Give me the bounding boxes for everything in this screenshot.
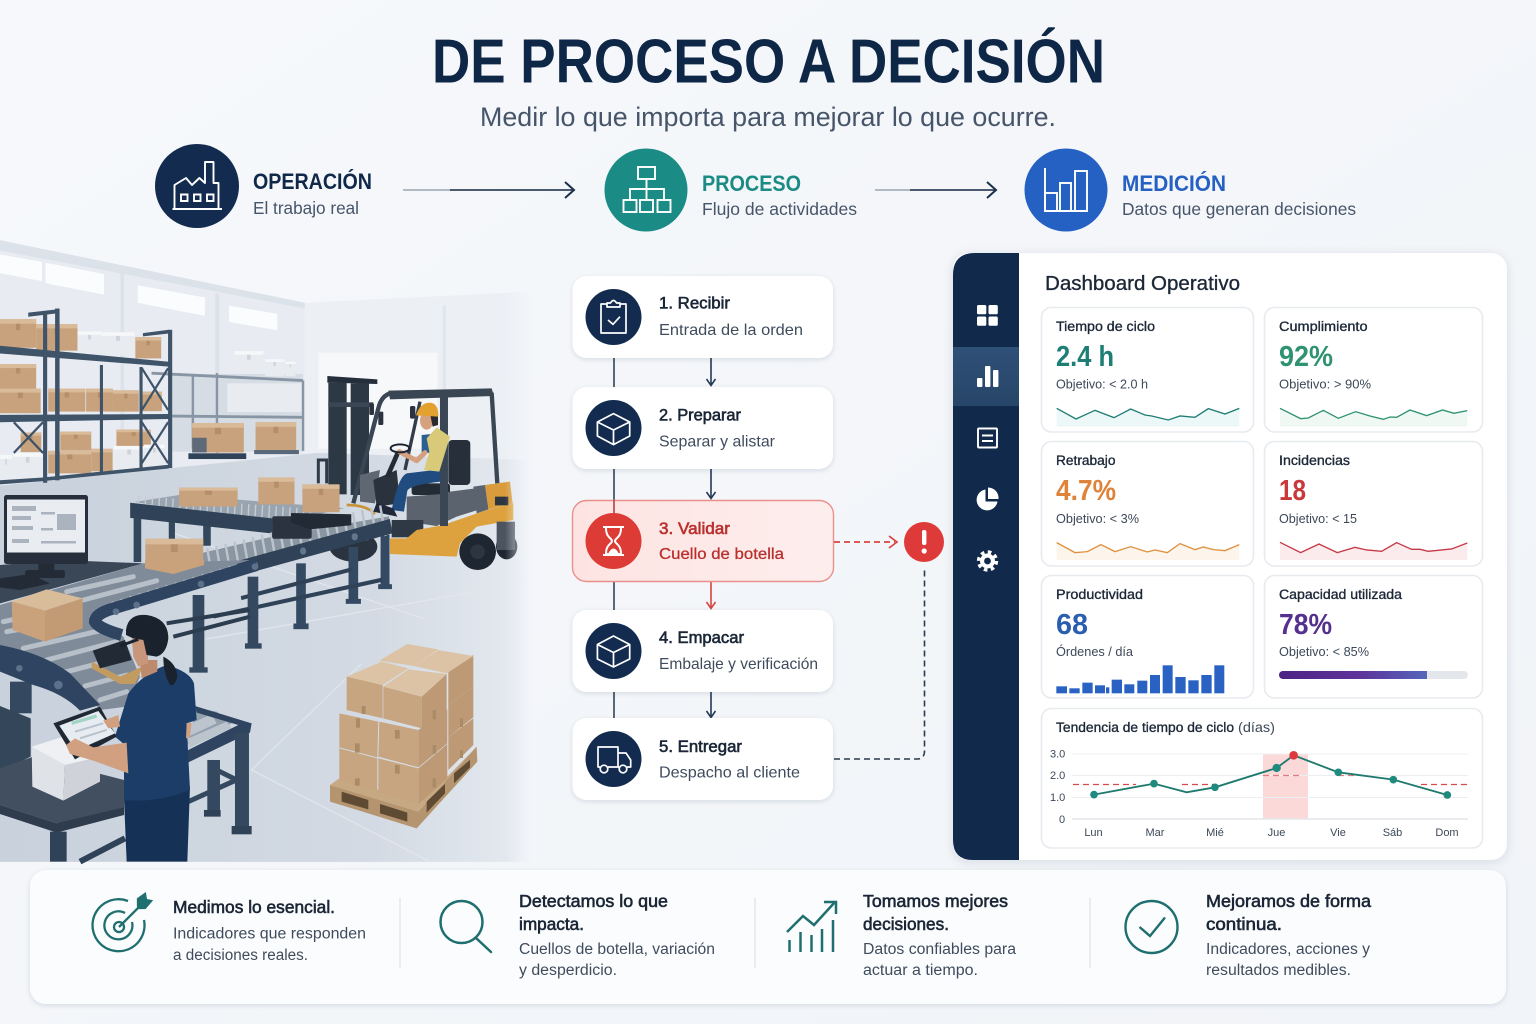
packing area: lower conveyor, table and worker (0, 558, 262, 862)
icon: target (93, 894, 151, 951)
scene edge fade (505, 290, 535, 862)
summary: mejoramos: resultados medibles. (1206, 962, 1351, 979)
header step: operación (155, 144, 372, 228)
summary: detectamos: impacta. (519, 914, 584, 934)
summary: medimos: Medimos lo esencial. (173, 897, 335, 917)
icon: bars (977, 366, 998, 387)
worker (53, 615, 197, 862)
step 2: preparar (572, 387, 833, 469)
chart title: (días) (1238, 720, 1275, 735)
pallet of boxes (330, 644, 477, 828)
connectors: process flow (614, 358, 716, 719)
forklift driver (373, 403, 450, 517)
axis labels: 3.0 (1050, 748, 1065, 760)
forklift (318, 376, 517, 570)
step 5: entregar (572, 718, 833, 800)
day labels (1084, 827, 1459, 839)
process flow (572, 276, 834, 800)
icon: delivery truck (586, 731, 642, 787)
summary: medimos: Indicadores que responden (173, 926, 366, 942)
day labels: Mar (1146, 827, 1165, 839)
sparkline: tiempo de ciclo (1057, 408, 1239, 427)
desk with keyboard (0, 558, 143, 603)
step 3: validar (bottleneck): Cuello de botella (659, 546, 784, 563)
box machine (0, 706, 31, 772)
icon: alert (904, 522, 944, 562)
dashboard panel (953, 253, 1507, 860)
white box (32, 737, 100, 801)
chart title: Tendencia de tiempo de ciclo (1056, 720, 1234, 735)
text: entregar: 5. Entregar (659, 738, 743, 756)
kpi card: productividad: Órdenes / día (1056, 644, 1133, 659)
summary: mejoramos: continua. (1206, 914, 1282, 934)
kpi card: productividad (1042, 576, 1254, 698)
arrow: bottleneck to alert (834, 536, 897, 548)
icon: hourglass (586, 513, 642, 569)
right table frame (185, 706, 252, 834)
axis labels: 1.0 (1050, 792, 1065, 804)
subtitle: Medir lo que importa para mejorar lo que ocurre. (480, 102, 1056, 132)
trend chart card (1042, 708, 1482, 848)
sparkline: cumplimiento (1280, 408, 1467, 427)
kpi card: productividad: 68 (1056, 609, 1088, 641)
axis labels: 0 (1059, 814, 1065, 826)
icon: clipboard (586, 289, 642, 345)
kpi card: incidencias: Objetivo: < 15 (1279, 512, 1357, 526)
conveyor rails (0, 563, 258, 711)
dashboard sidebar (953, 253, 1019, 860)
heading: medición: MEDICIÓN (1122, 171, 1226, 196)
summary: detectamos: y desperdicio. (519, 962, 617, 979)
kpi card: cumplimiento: Objetivo: > 90% (1279, 378, 1371, 392)
target line (1073, 776, 1468, 784)
forklift body (390, 482, 515, 557)
summary: medimos: a decisiones reales. (173, 947, 308, 964)
day labels: Sáb (1383, 827, 1402, 839)
back shelving (152, 351, 303, 459)
summary: tomamos: Tomamos mejores (863, 891, 1008, 911)
step 3: validar (bottleneck) (572, 500, 834, 582)
text: el trabajo real: El trabajo real (253, 198, 359, 218)
main conveyor with legs (0, 513, 392, 643)
illustration: warehouse floor operation (0, 240, 534, 862)
legs and frame (10, 577, 262, 713)
kpi card: incidencias (1264, 442, 1482, 566)
day labels: Vie (1330, 827, 1346, 839)
summary: tomamos (787, 891, 1016, 979)
day labels: Lun (1084, 827, 1103, 839)
text: validar: 3. Validar (659, 520, 731, 538)
icon: magnifier (440, 901, 491, 952)
kpi card: tiempo de ciclo: Tiempo de ciclo (1056, 319, 1155, 334)
dashed feedback line (834, 568, 924, 759)
kpi card: incidencias: 18 (1279, 475, 1306, 507)
dashboard title: Dashboard Operativo (1045, 273, 1240, 295)
day labels: Jue (1268, 827, 1285, 839)
icon: pie chart (977, 487, 999, 510)
kpi card: cumplimiento: 92% (1279, 341, 1333, 373)
icon: factory (155, 144, 239, 228)
icon: document (978, 428, 997, 448)
step 1: recibir (572, 276, 833, 358)
kpi card: capacidad utilizada: 78% (1279, 609, 1332, 641)
icon: rising chart (787, 902, 836, 952)
conveyor surface (0, 560, 250, 710)
title: DE PROCESO A DECISIÓN (432, 26, 1105, 96)
kpi card: tiempo de ciclo (1042, 308, 1254, 432)
day labels: Dom (1435, 827, 1459, 839)
box on conveyor (12, 560, 204, 642)
text: datos que generan decisiones: Datos que generan decisiones (1122, 199, 1356, 219)
left shelving with boxes (0, 309, 172, 484)
icon: check circle (1126, 901, 1178, 953)
kpi card: cumplimiento (1264, 308, 1482, 432)
text: recibir: 1. Recibir (659, 294, 731, 312)
heading: proceso: PROCESO (702, 171, 801, 196)
arrow: operación to proceso (403, 182, 574, 198)
header step: proceso (604, 148, 857, 232)
scanner (92, 640, 143, 684)
kpi card: retrabajo: 4.7% (1056, 475, 1116, 507)
highlighted day band (1263, 754, 1308, 819)
sparkline: incidencias (1280, 542, 1467, 560)
text: empacar: 4. Empacar (659, 629, 745, 647)
summary: detectamos (440, 891, 715, 979)
line over validar icon (613, 500, 615, 513)
summary: tomamos: Datos confiables para (863, 941, 1016, 958)
arrow: proceso to medición (875, 182, 996, 198)
kpi card: retrabajo: Retrabajo (1056, 453, 1116, 468)
sparkline: retrabajo (1057, 543, 1239, 560)
axis labels: 2.0 (1050, 770, 1065, 782)
bottom summary bar (30, 870, 1506, 1004)
summary: mejoramos: Indicadores, acciones y (1206, 941, 1370, 958)
trend line (1090, 751, 1451, 799)
kpi card: productividad: Productividad (1056, 587, 1143, 602)
day labels: Mié (1206, 827, 1224, 839)
warehouse walls and floor (0, 240, 534, 862)
step 1: recibir: Entrada de la orden (659, 322, 803, 339)
icon: bar chart (1024, 148, 1108, 232)
kpi card: tiempo de ciclo: 2.4 h (1056, 341, 1114, 373)
kpi card: retrabajo: Objetivo: < 3% (1056, 512, 1139, 526)
bar chart: productividad (1056, 665, 1224, 693)
step 2: preparar: Separar y alistar (659, 434, 776, 450)
header step: medición (1024, 148, 1356, 232)
step 4: empacar (572, 610, 833, 692)
text: flujo de actividades: Flujo de actividades (702, 199, 857, 219)
icon: gear (978, 552, 996, 570)
kpi card: incidencias: Incidencias (1279, 453, 1350, 468)
summary: mejoramos: Mejoramos de forma (1206, 891, 1371, 911)
axis labels (1050, 748, 1065, 826)
packing table (0, 757, 125, 862)
summary: mejoramos (1126, 891, 1371, 979)
icon: org chart (604, 148, 688, 232)
kpi card: capacidad utilizada: Capacidad utilizada (1279, 587, 1402, 602)
summary: tomamos: decisiones. (863, 914, 949, 934)
progress bar: capacidad (1279, 671, 1468, 679)
kpi card: retrabajo (1042, 442, 1254, 566)
back conveyor (130, 477, 344, 562)
summary: medimos (93, 894, 366, 964)
summary: tomamos: actuar a tiempo. (863, 962, 978, 979)
summary: detectamos: Detectamos lo que (519, 891, 668, 911)
icon: closed box (586, 623, 642, 679)
icon: grid (977, 305, 998, 326)
summary: detectamos: Cuellos de botella, variación (519, 941, 715, 958)
step 5: entregar: Despacho al cliente (659, 764, 800, 782)
icon: open box (586, 400, 642, 456)
active nav item (953, 347, 1019, 406)
text: preparar: 2. Preparar (659, 406, 741, 424)
kpi card: capacidad utilizada (1264, 576, 1482, 698)
kpi card: tiempo de ciclo: Objetivo: < 2.0 h (1056, 378, 1148, 392)
computer monitor (4, 495, 88, 564)
heading: operación: OPERACIÓN (253, 169, 372, 194)
kpi card: cumplimiento: Cumplimiento (1279, 319, 1368, 334)
kpi card: capacidad utilizada: Objetivo: < 85% (1279, 645, 1369, 659)
step 4: empacar: Embalaje y verificación (659, 656, 818, 673)
